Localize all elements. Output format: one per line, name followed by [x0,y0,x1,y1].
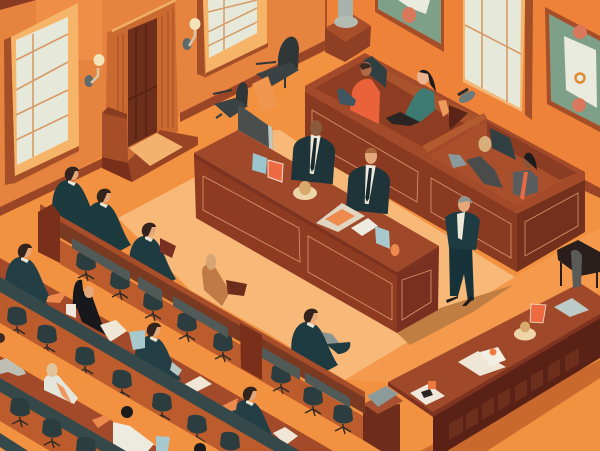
desk right face [397,248,439,333]
gallery row 1 rail [40,204,365,414]
row 1 chairs [76,252,353,434]
judge desk [194,120,439,333]
left wall skirting [0,40,326,216]
bench panels [449,348,579,440]
window top center [197,0,268,78]
jury divider [422,113,487,152]
window right [463,0,533,120]
post center [240,323,262,380]
row 4 rail [0,433,28,451]
jury front panels [312,110,578,258]
row 3 desk [0,356,164,451]
tablets [252,153,283,182]
jury front face [305,90,517,272]
wall lamp right [182,18,200,50]
pedestal column [325,0,371,62]
juror orange [337,62,380,124]
gallery row 1 people [52,167,350,372]
door [128,18,157,147]
door step [102,130,198,182]
upper left picture frame [0,0,36,10]
bench shadow [420,360,600,451]
tablet small [375,226,390,249]
clipboard orange [438,100,449,117]
wall lamp left [84,54,104,87]
post left [38,204,60,263]
desk trim [194,153,439,276]
painting right [545,7,600,132]
door assembly [102,0,198,182]
row 2 people [5,244,298,450]
standing man [445,196,480,306]
jury rim [305,53,585,214]
tablet [554,298,589,317]
row 3 chairs [10,398,96,451]
lawyer right [345,148,393,214]
red notebook [530,304,546,323]
right wall [326,0,600,195]
lawyer left [290,120,338,184]
row 2 chairs [7,307,240,451]
bench top [388,283,600,416]
jury side face [517,176,585,272]
row 1 seat backs [72,238,350,408]
light carpet [118,130,515,380]
under row 2 floor [0,292,274,451]
aisle row 3-4 [0,421,50,451]
left wall [0,0,326,208]
high-back chair small [213,82,248,118]
head bottom [194,443,206,451]
row 3 people [0,333,170,451]
jury seat backs [364,56,387,88]
desk top [194,130,439,272]
orange cushion by chairs [252,76,278,112]
cup orange [390,244,400,256]
desk panels [203,176,431,320]
row 2 papers [46,291,68,303]
shadow under judge desk [397,285,513,345]
jury interior right [428,122,577,205]
dark haired woman [73,280,106,335]
folder on post [367,386,398,407]
under row 3 floor [0,392,101,451]
woman in tan [202,254,230,306]
door surround [106,0,178,165]
door mat [129,133,183,166]
note with cup [410,381,445,405]
door side box [102,113,128,163]
teacup [293,181,317,200]
clerk bench [363,283,600,451]
wall corner line [325,0,327,44]
bench face [433,318,600,451]
gallery row 2 desk [0,258,340,451]
floor band near clerk bench [345,228,600,382]
window left [4,3,79,185]
corner post [363,404,400,451]
seated man right [291,309,350,372]
row 2 rail [0,277,300,451]
dark chair right [557,240,600,288]
saucer cup [514,322,536,340]
row 1 shadow floor [60,240,363,440]
row 3 rail [0,378,126,451]
papers on desk [316,203,378,236]
painting center [375,0,444,52]
monitor [238,106,273,150]
open book [458,347,506,376]
high-back chair large [256,37,299,92]
jury box [305,53,585,272]
juror blond woman [448,136,503,188]
right wall skirting [570,172,600,198]
lamp on jury rim [457,89,477,105]
jury interior left [315,60,480,148]
aisle row 2-3 [0,323,220,451]
juror man right [513,153,538,200]
juror teal [386,70,436,126]
desk left face [194,156,397,333]
